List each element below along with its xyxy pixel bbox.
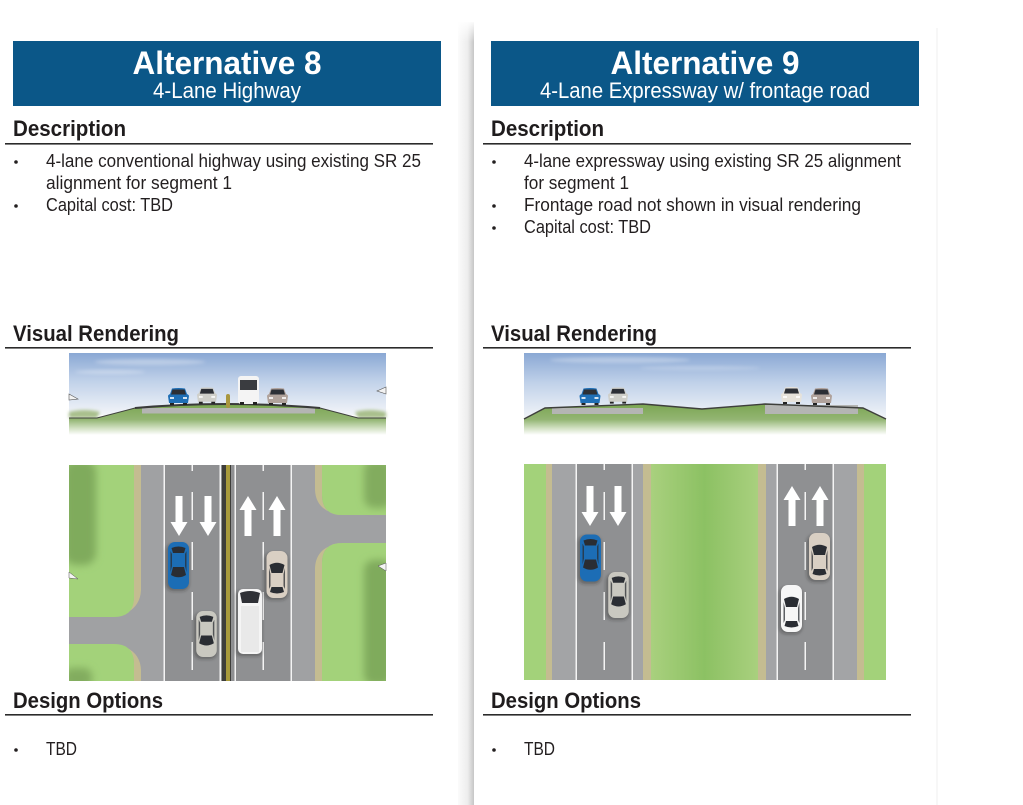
description bullets: alignment for segment 1 (46, 172, 232, 193)
panel: alternative 8 (5, 41, 441, 759)
plan rendering: alternative 9 (524, 464, 886, 680)
median barrier (226, 394, 230, 408)
heading: description: Description (491, 116, 604, 141)
cross-section rendering: alternative 8 (69, 353, 386, 435)
header: alternative 9: Alternative 9 (610, 45, 800, 81)
design options bullets: TBD (524, 738, 555, 759)
heading: visual rendering: Visual Rendering (13, 321, 179, 346)
cross-section rendering: alternative 9 (524, 353, 886, 435)
design options bullets (14, 738, 77, 759)
heading: visual rendering: Visual Rendering (491, 321, 657, 346)
description bullets: Capital cost: TBD (524, 216, 651, 237)
description bullets: for segment 1 (524, 172, 629, 193)
heading: design options: Design Options (491, 688, 641, 713)
header: alternative 9: 4-Lane Expressway w/ frontage road (540, 78, 870, 103)
lane markings (576, 464, 834, 680)
header: alternative 8: 4-Lane Highway (153, 78, 301, 103)
header: alternative 8 (13, 41, 441, 106)
design options bullets (492, 738, 555, 759)
description bullets (492, 150, 901, 237)
description bullets: Frontage road not shown in visual rendering (524, 194, 861, 215)
lane markings (164, 465, 292, 681)
median (222, 465, 231, 681)
header: alternative 9 (491, 41, 919, 106)
description bullets: Capital cost: TBD (46, 194, 173, 215)
direction arrows (582, 486, 828, 526)
cars in cross-section (580, 387, 832, 405)
roadway strips (546, 464, 864, 680)
header: alternative 8: Alternative 8 (132, 45, 322, 81)
cars in cross-section (168, 376, 288, 405)
cars in plan view (166, 542, 288, 659)
page fold shadow (458, 20, 938, 805)
design options bullets: TBD (46, 738, 77, 759)
plan rendering: alternative 8 (64, 460, 392, 688)
heading: description: Description (13, 116, 126, 141)
panel: alternative 9 (483, 41, 919, 759)
description bullets (14, 150, 421, 215)
heading: design options: Design Options (13, 688, 163, 713)
description bullets: 4-lane conventional highway using existing SR 25 (46, 150, 421, 171)
direction arrows (170, 496, 286, 536)
description bullets: 4-lane expressway using existing SR 25 alignment (524, 150, 901, 171)
roadside green and cross streets (64, 460, 392, 688)
cars in plan view (578, 533, 830, 634)
